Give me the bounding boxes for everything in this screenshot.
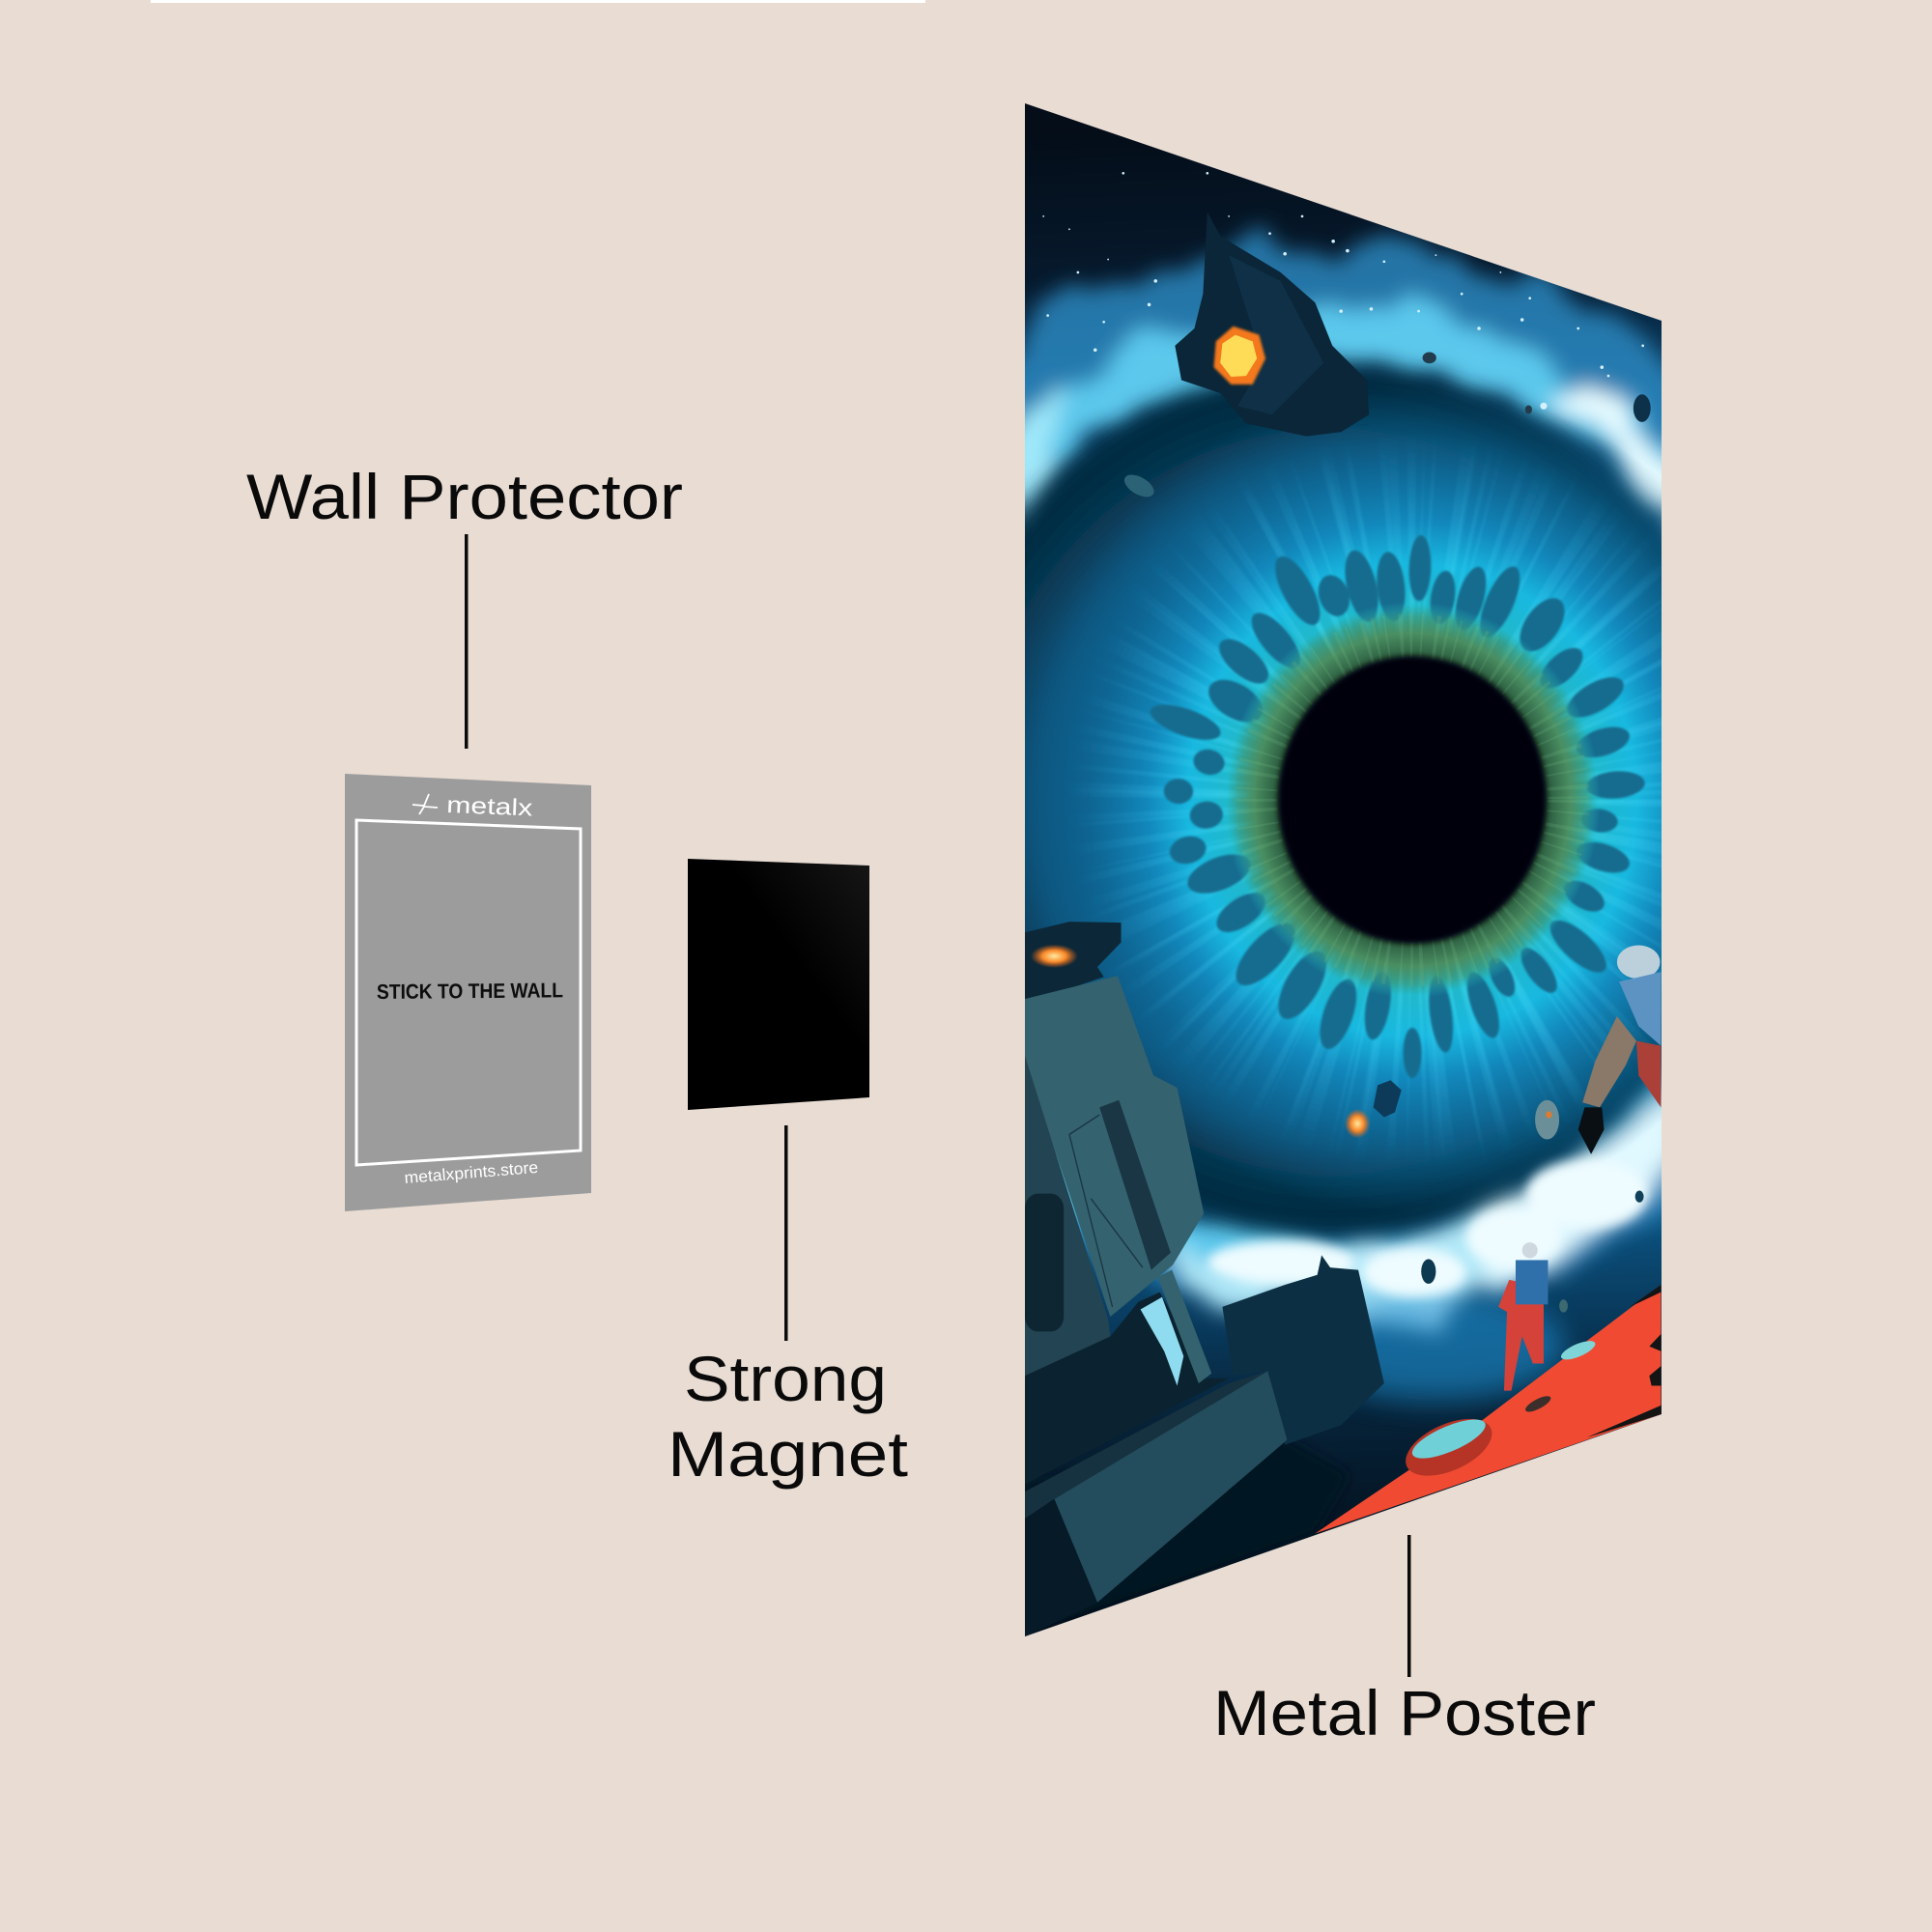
label: Metal Poster: Metal Poster [1213, 1677, 1596, 1748]
lower space darkening [1025, 1435, 1350, 1637]
machine: recess [1025, 1194, 1064, 1331]
green collarette [1224, 602, 1601, 998]
fireball [1214, 327, 1265, 384]
leader line: Strong Magnet [784, 1125, 788, 1341]
leader line: Metal Poster [1407, 1535, 1410, 1677]
machine: main tower [1025, 976, 1204, 1317]
astronaut right [1578, 946, 1661, 1154]
leader line: Wall Protector [465, 534, 468, 749]
wrecked ship [1175, 212, 1369, 437]
strut [1157, 1270, 1211, 1383]
machine: muzzle flame [1031, 945, 1078, 968]
white strip at top edge [151, 0, 925, 3]
icon: metalx logo mark [412, 794, 438, 814]
iris rays [1165, 539, 1660, 1061]
artwork details, top [1042, 172, 1651, 501]
panel: wall protector sheet [345, 774, 591, 1211]
panel: metal poster artwork [1025, 103, 1662, 1636]
label: Strong Magnet: Strong [684, 1343, 887, 1414]
deck pod [1399, 1407, 1498, 1488]
text: stick to the wall: STICK TO THE WALL [377, 979, 563, 1004]
astronaut standing [1498, 1242, 1548, 1391]
pupil [1278, 656, 1547, 944]
stars [1042, 172, 1644, 410]
machine: gun mount [1025, 922, 1122, 999]
swimmer silhouette and spark [1374, 1080, 1402, 1118]
label: Strong Magnet: Magnet [668, 1418, 908, 1490]
iris colour field [1065, 396, 1662, 1204]
artwork details, bottom [1025, 922, 1661, 1637]
beam [1054, 1371, 1287, 1603]
bright gap [1141, 1297, 1183, 1385]
white frame [356, 820, 581, 1165]
machine: tower channel [1099, 1100, 1171, 1270]
machine: panel line [1069, 1115, 1143, 1307]
red deck [1315, 1285, 1661, 1534]
deck dark marks [1587, 1285, 1661, 1437]
space background [1025, 103, 1662, 1639]
debris [1121, 353, 1651, 501]
lower blue glow [1306, 1293, 1565, 1401]
dark iris outer ring [1025, 349, 1662, 1256]
dark engine [1222, 1255, 1384, 1445]
sheet body [345, 774, 591, 1211]
text: website: metalxprints.store [404, 1158, 539, 1187]
iris petals [1147, 535, 1646, 1078]
debris bottom [1421, 1100, 1644, 1313]
clouds [1208, 1159, 1647, 1297]
collarette rays [1256, 636, 1569, 964]
logo text: metalx: metalx [446, 792, 533, 821]
nebula ring glow [1025, 215, 1662, 1343]
label: Wall Protector: Wall Protector [246, 461, 683, 532]
label: Strong Magnet [668, 1343, 908, 1490]
machine: tower left face [1025, 1056, 1110, 1376]
machine: lower dark [1025, 1293, 1229, 1484]
deck hatches [1559, 1337, 1597, 1363]
panel: strong magnet [688, 859, 869, 1110]
